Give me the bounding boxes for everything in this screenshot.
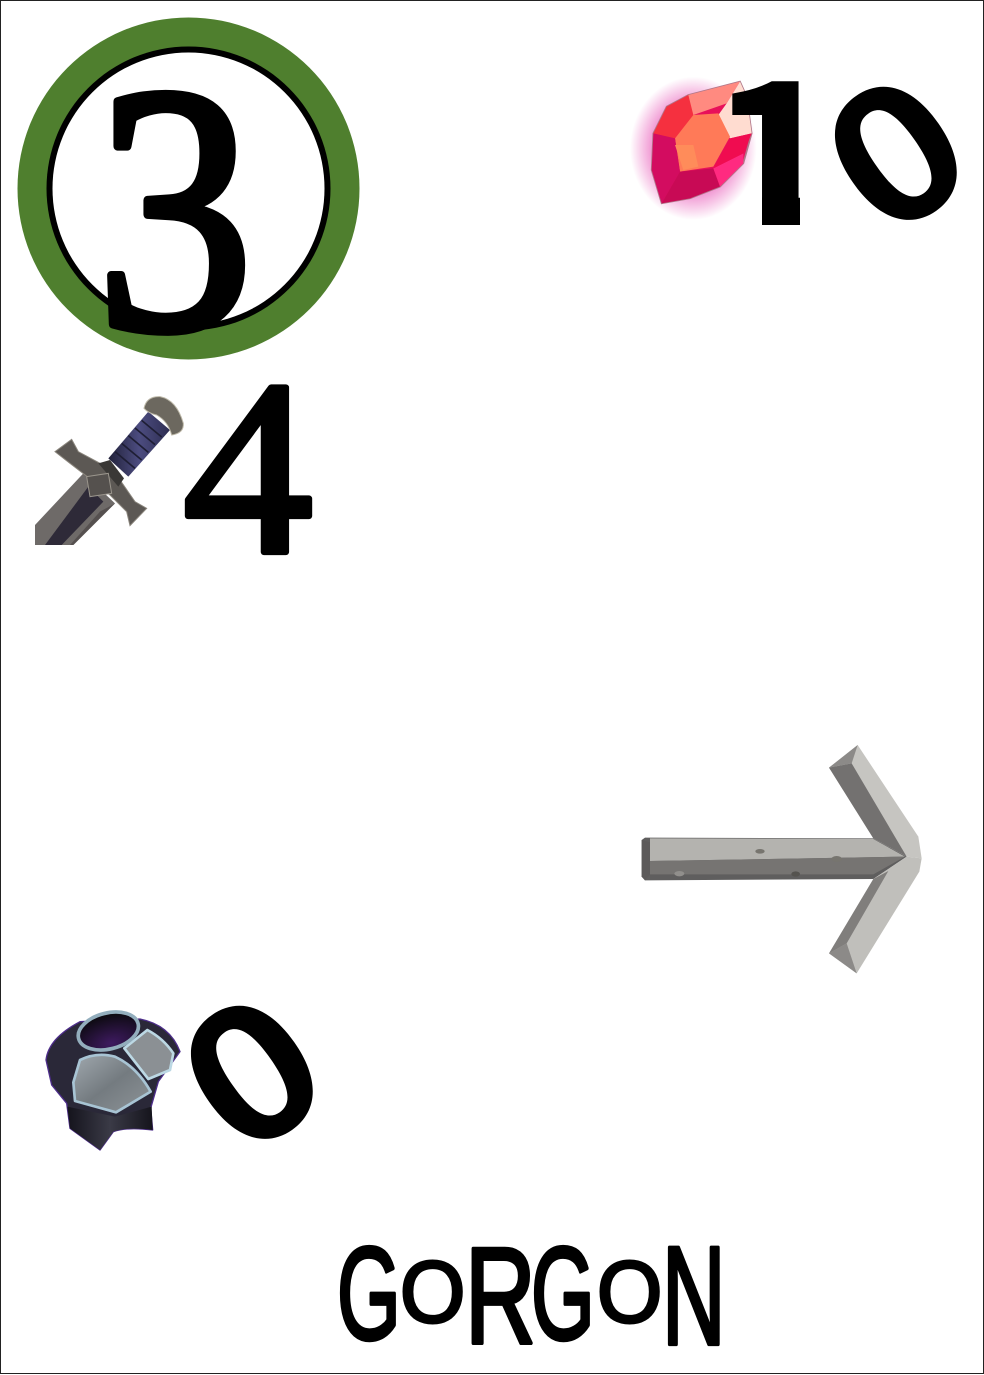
- monster name: N: [662, 1217, 726, 1374]
- icon: ruby gem: [630, 77, 757, 220]
- attack value: 4: [183, 330, 313, 607]
- cost value: [732, 81, 957, 225]
- armor value: 0: [116, 915, 372, 1207]
- monster name: G: [531, 1221, 595, 1368]
- cost value: 1: [711, 0, 841, 279]
- level badge: 3: [96, 15, 253, 405]
- icon: sword: [35, 397, 183, 545]
- monster name: [337, 1217, 726, 1374]
- monster name: R: [465, 1220, 536, 1373]
- monster name: O: [400, 1245, 465, 1341]
- icon: armor: [46, 1006, 180, 1150]
- level badge: [18, 15, 360, 405]
- monster name: G: [337, 1221, 401, 1368]
- monster name: O: [597, 1245, 662, 1341]
- icon: stone arrow: [642, 745, 922, 973]
